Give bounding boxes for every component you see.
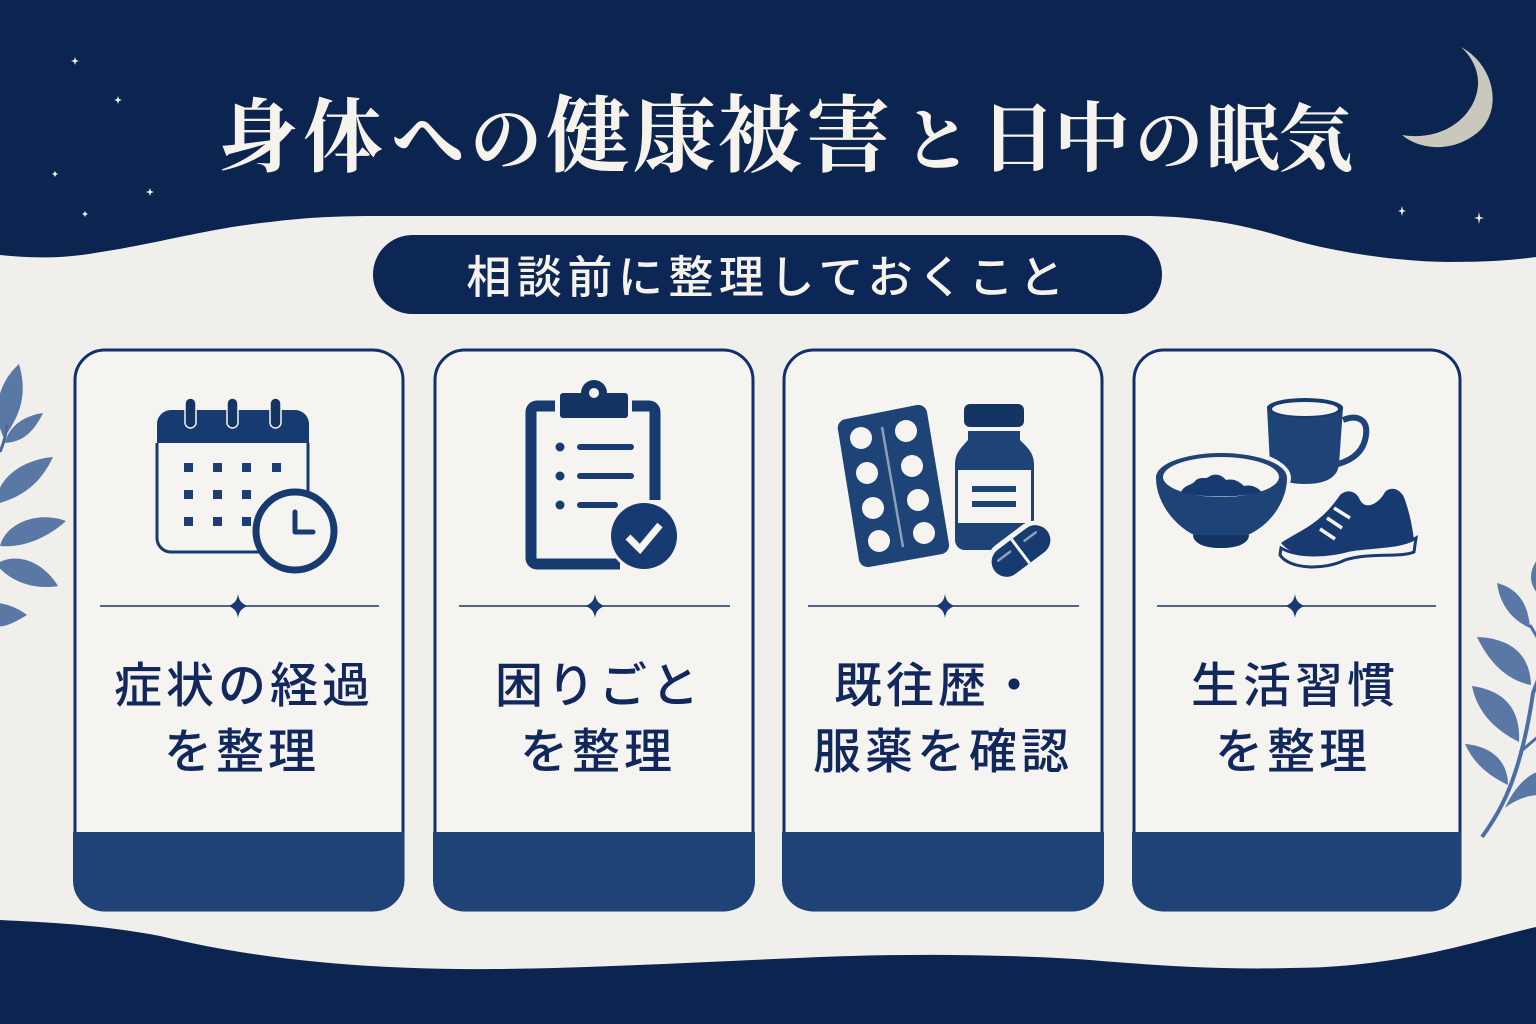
card footer band bbox=[433, 832, 755, 911]
divider bbox=[100, 594, 379, 618]
divider bbox=[459, 594, 730, 618]
card footer band bbox=[73, 832, 404, 911]
icon: crescent moon bbox=[1402, 47, 1493, 147]
icon: blister pack, bottle and capsule bbox=[838, 404, 1063, 589]
card label: 生活習慣 bbox=[1191, 660, 1399, 713]
card label: 困りごと bbox=[495, 660, 703, 713]
divider bbox=[1157, 594, 1436, 618]
panel: medical history and medication bbox=[782, 350, 1104, 911]
card footer band bbox=[1132, 832, 1461, 911]
divider bbox=[808, 594, 1079, 618]
paper wave panel bbox=[0, 216, 1536, 969]
icon: calendar with clock bbox=[157, 398, 334, 570]
title: 身体への健康被害と日中の眠気 bbox=[218, 91, 1353, 184]
card label: 服薬を確認 bbox=[813, 726, 1073, 779]
subtitle pill: 相談前に整理しておくこと bbox=[466, 252, 1070, 303]
panel: troubles bbox=[433, 350, 755, 911]
panel: symptom progress bbox=[73, 350, 404, 911]
left leaves decoration bbox=[0, 364, 66, 626]
panel: lifestyle habits bbox=[1132, 350, 1461, 911]
subtitle pill bbox=[373, 235, 1162, 314]
icon: mug, bowl and shoe bbox=[1151, 398, 1416, 567]
card label: を整理 bbox=[520, 726, 676, 779]
card label: を整理 bbox=[1215, 726, 1371, 779]
stars bbox=[52, 57, 1484, 224]
card footer band bbox=[782, 832, 1104, 911]
icon: clipboard with check bbox=[531, 380, 680, 572]
right leaves decoration bbox=[1465, 556, 1536, 837]
card label: 既往歴・ bbox=[834, 660, 1042, 713]
card label: 症状の経過 bbox=[114, 660, 374, 713]
card label: を整理 bbox=[164, 726, 320, 779]
